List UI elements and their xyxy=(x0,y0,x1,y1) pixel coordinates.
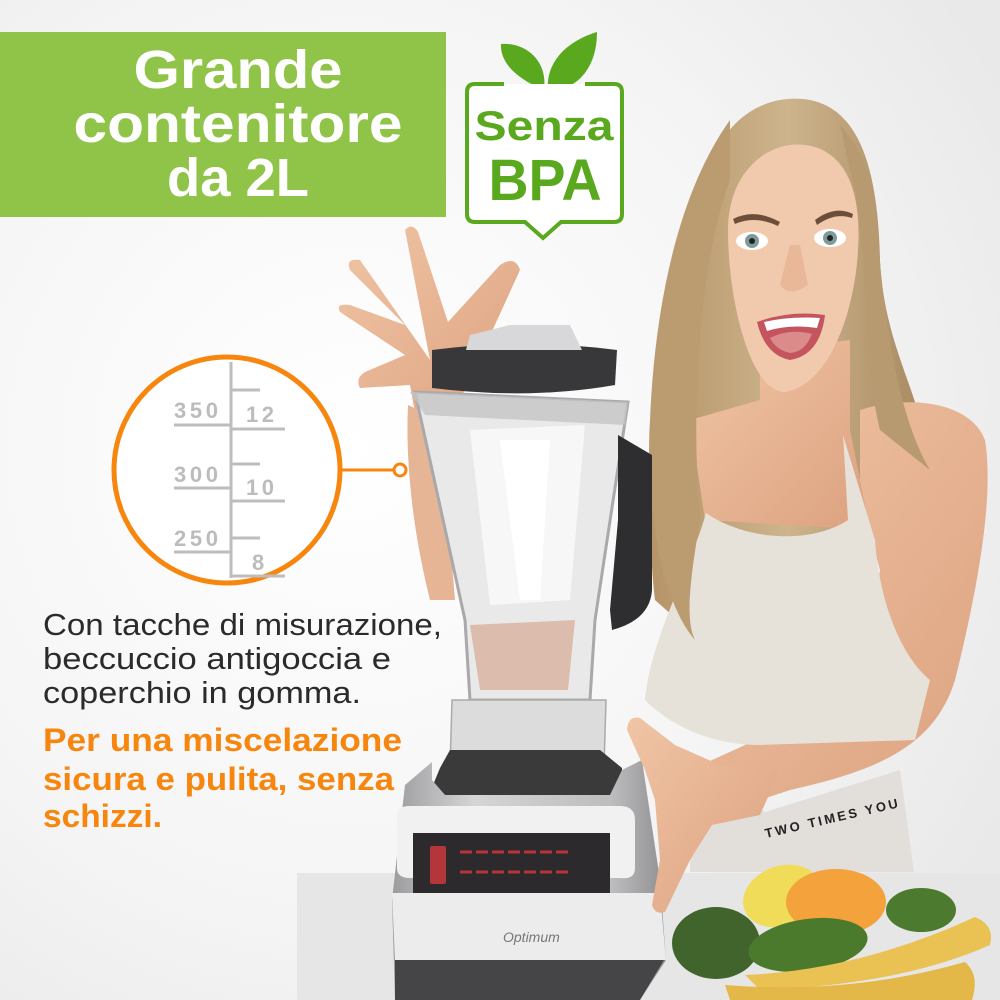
leaf icon xyxy=(501,32,597,91)
woman xyxy=(645,99,988,872)
title text: Grande xyxy=(134,40,342,100)
lid xyxy=(432,344,617,393)
connector line xyxy=(342,468,394,472)
orange highlight text: Per una miscelazione xyxy=(43,722,402,758)
title banner: da 2L xyxy=(167,148,309,208)
face xyxy=(728,144,859,392)
orange highlight text xyxy=(43,722,402,834)
lemon xyxy=(734,854,830,938)
nose xyxy=(780,245,808,292)
hair front xyxy=(649,120,730,640)
base lower xyxy=(392,893,666,960)
hair back xyxy=(651,99,925,640)
orange highlight text: schizzi. xyxy=(43,798,162,834)
counter top xyxy=(297,873,1000,1000)
magnifier circle xyxy=(114,357,340,583)
liquid tint xyxy=(470,620,575,690)
BPA free badge xyxy=(467,32,622,238)
panel dark display xyxy=(413,833,610,895)
measurement callout xyxy=(114,357,406,583)
top xyxy=(645,435,930,745)
scale numbers: 10 xyxy=(246,475,274,500)
banana top xyxy=(745,917,991,990)
description text xyxy=(43,607,442,710)
hand behind blender xyxy=(339,226,520,440)
brand: Optimum xyxy=(503,929,560,945)
title banner: contenitore xyxy=(74,94,402,154)
avocado middle xyxy=(745,911,871,979)
description text: coperchio in gomma. xyxy=(43,675,361,710)
description text: Con tacche di misurazione, xyxy=(43,607,442,642)
BPA free badge: BPA xyxy=(488,148,602,213)
arm and shoulder xyxy=(690,402,988,815)
front hand xyxy=(627,718,780,913)
scale numbers: 350 xyxy=(174,398,218,423)
badge text: Senza xyxy=(474,102,614,149)
scale numbers: 8 xyxy=(252,550,264,575)
speech bubble outline xyxy=(467,84,622,238)
scale numbers: 12 xyxy=(246,402,274,427)
jar xyxy=(415,392,628,700)
motor base xyxy=(392,760,666,1000)
leggings xyxy=(690,760,914,872)
neck and chest xyxy=(690,340,870,530)
connector dot xyxy=(394,464,406,476)
eyes xyxy=(736,232,768,250)
scale numbers: 250 xyxy=(174,526,218,551)
title banner xyxy=(0,32,446,217)
mouth xyxy=(757,314,825,360)
avocado left xyxy=(672,907,760,979)
description text: beccuccio antigoccia e xyxy=(43,641,391,676)
orange xyxy=(786,869,886,935)
blender xyxy=(392,325,666,1000)
orange highlight text: sicura e pulita, senza xyxy=(43,761,394,797)
jar inner reflection xyxy=(470,425,585,605)
jar collar xyxy=(450,700,606,768)
scale numbers xyxy=(174,398,274,575)
jar foot xyxy=(433,750,622,795)
fruit xyxy=(672,854,991,1000)
brows xyxy=(733,211,853,226)
handle xyxy=(610,435,652,630)
scale numbers: 300 xyxy=(174,462,218,487)
avocado right xyxy=(886,888,956,932)
control panel xyxy=(397,806,635,878)
forearm behind jar xyxy=(407,405,455,600)
waistband text: TWO TIMES YOU xyxy=(763,795,901,841)
scale xyxy=(174,362,285,578)
banana bottom xyxy=(725,962,975,1000)
